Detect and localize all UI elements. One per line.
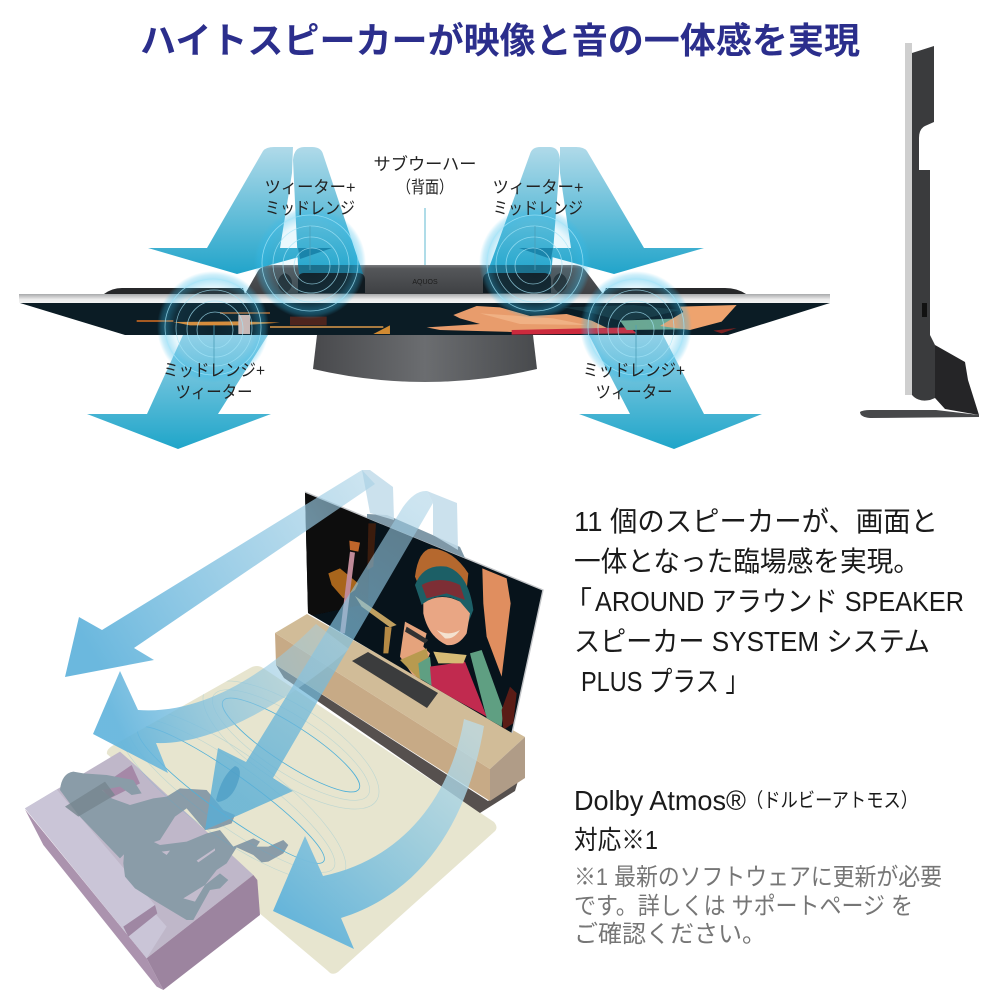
sofa: backrest [100,765,140,798]
stand [313,335,537,382]
room: sofa and viewers [25,752,288,990]
label: subwoofer: （背面） [397,178,453,197]
side: stand base [860,410,979,418]
ring group: lower left [157,271,269,383]
label: upper right speaker: ツィーター+ [492,178,584,197]
diagram: living room [25,470,543,990]
arrow overlap: upper left [298,248,332,259]
arrow: room left curve [93,624,349,773]
footnote [574,864,942,948]
text block: eleven speakers [564,506,964,697]
text block: Dolby Atmos [574,785,918,855]
soundbar [245,265,603,294]
arrow: upper left into speaker [293,147,360,265]
ring group: upper right [479,207,591,319]
arrow: room centre fold [427,491,458,550]
label: upper right speaker: ミッドレンジ [493,199,583,218]
AQUOS logo: AQUOS [412,279,438,286]
title: ハイトスピーカーが映像と音の一体感を実現 [140,20,860,61]
text block: eleven speakers: 一体となった臨場感を実現。 [574,546,920,577]
sound rings [157,207,692,383]
ring group: lower right [580,271,692,383]
room: console front [275,633,490,801]
side: silver panel [905,43,912,395]
sofa: top [25,752,253,958]
room: rug [107,666,496,974]
text block: eleven speakers: PLUS プラス 」 [581,666,749,697]
viewer: near person [123,830,288,920]
diagram: TV side view [860,43,979,418]
sofa: ledge [25,789,167,958]
soundbar overlay under arrows [298,265,552,274]
room: TV picture [305,492,543,733]
screen picture: left streaks [137,312,390,334]
TV rear strips [104,288,746,294]
arrow: upper left outward [148,147,332,274]
label: upper right speaker [492,178,584,218]
arrow: foot shadow under arrow [216,766,240,802]
arrow: upper right into speaker [490,147,560,265]
arrow: room centre [205,491,433,830]
TV top edge [19,294,830,303]
text block: Dolby Atmos: Dolby Atmos® [574,785,746,816]
text block: eleven speakers: 「 [564,586,592,617]
room: photo content [303,490,517,730]
text block: Dolby Atmos: （ドルビーアトモス） [746,789,918,812]
label: upper left speaker: ミッドレンジ [265,199,355,218]
screen picture: singer [427,305,737,335]
side drivers [278,273,567,293]
footnote: です。詳しくは サポートページ を [574,893,913,920]
room: TV edge [305,492,543,733]
label: subwoofer: サブウーハー [374,154,476,174]
ring group: upper left [254,207,366,319]
sofa: front side [147,875,260,990]
side: dark body [912,46,935,401]
footnote: ご確認ください。 [574,921,766,948]
room: TV stand foot [352,652,438,708]
viewer: dark overlap [65,782,115,817]
sofa: notch [123,905,157,937]
arrow: upper right outward [519,147,704,274]
room: floor rings [126,680,380,874]
footnote: ※1 最新のソフトウェアに更新が必要 [574,864,942,891]
subwoofer leader line [424,208,426,265]
arrow: room right curve [273,719,484,949]
text block: eleven speakers: スピーカー SYSTEM システム [574,626,930,657]
label: upper left speaker: ツィーター+ [264,178,356,197]
arrow: lower right [579,335,762,449]
viewer: highlights [162,848,215,902]
label: lower left speaker: ツィーター [176,383,252,402]
text block: Dolby Atmos: 対応※1 [574,825,658,855]
speaker leader lines [214,226,636,372]
room: console base [276,665,518,813]
room: console side [490,737,525,801]
room: rear soundbar [367,514,465,558]
label: lower left speaker: ミッドレンジ+ [163,361,265,380]
arrow overlap: upper right [519,248,553,259]
TV screen [20,303,830,335]
diagram: TV top view [19,147,830,449]
side: stand arm [935,345,979,415]
arrow: room long left fold [362,470,394,520]
label: lower right speaker [583,361,685,402]
label: subwoofer [374,154,476,197]
label: upper left speaker [264,178,356,218]
arrow: lower left [87,335,271,449]
room: console top [275,614,525,769]
label: lower left speaker [163,361,265,402]
speaker drivers [298,273,551,293]
label: lower right speaker: ツィーター [596,383,672,402]
arrow: room long left [65,470,375,677]
text block: eleven speakers: AROUND アラウンド SPEAKER [595,586,964,617]
label: lower right speaker: ミッドレンジ+ [583,361,685,380]
text block: eleven speakers: 11 個のスピーカーが、画面と [574,506,938,537]
sofa: left side [25,809,163,990]
side: ports [922,303,927,317]
viewer: far person [60,772,235,858]
